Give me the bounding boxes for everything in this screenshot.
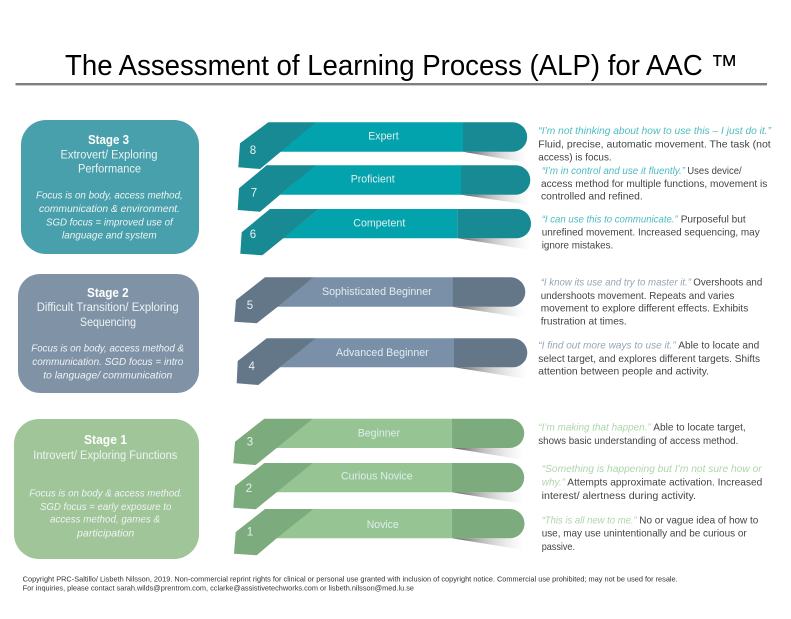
description: level 1 xyxy=(542,516,759,553)
panel: stage 2: communication. SGD focus = intro xyxy=(32,356,183,368)
level 7 ribbon: Proficient: 7 xyxy=(251,188,257,200)
level 2 ribbon: Curious Novice: Curious Novice xyxy=(341,470,413,482)
description: level 5 xyxy=(541,278,763,328)
level 2 ribbon: Curious Novice xyxy=(233,463,524,509)
description: level 2: why.” xyxy=(542,478,566,489)
level 6 ribbon: Competent xyxy=(240,209,531,255)
panel: stage 3: Extrovert/ Exploring xyxy=(60,150,158,162)
panel: stage 2: Focus is on body, access method & xyxy=(31,343,184,355)
panel: stage 2: Difficult Transition/ Exploring xyxy=(37,302,179,314)
description: level 5: frustration at times. xyxy=(541,317,627,328)
description: level 1: use, may use unintentionally and be curious or xyxy=(542,529,747,540)
description: level 5: “I know its use and try to master it.” xyxy=(541,278,692,289)
description: level 7 xyxy=(541,166,767,203)
panel: stage 3: Focus is on body, access method, xyxy=(36,190,183,202)
description: level 1: passive. xyxy=(542,542,575,553)
description: level 4: attention between people and activity. xyxy=(538,367,709,378)
description: level 8: “I’m not thinking about how to use this – I just do it.” xyxy=(538,126,772,137)
panel: stage 1: Stage 1 xyxy=(84,433,127,447)
level 5 ribbon: Sophisticated Beginner: Sophisticated Beginner xyxy=(322,286,432,298)
description: level 3: shows basic understanding of access method. xyxy=(538,436,738,447)
level 8 ribbon: Expert xyxy=(238,122,527,169)
level 8 ribbon: Expert: 8 xyxy=(250,145,256,157)
description: level 4: select target, and explores different targets. Shifts xyxy=(538,354,760,365)
level 1 ribbon: Novice: 1 xyxy=(247,526,253,538)
level 3 ribbon: Beginner: Beginner xyxy=(358,427,400,439)
panel: stage 1: Introvert/ Exploring Functions xyxy=(33,450,178,462)
level 2 ribbon: Curious Novice: 2 xyxy=(246,483,252,495)
level 1 ribbon: Novice xyxy=(234,509,525,555)
level 4 ribbon: Advanced Beginner: Advanced Beginner xyxy=(336,347,429,359)
level 7 ribbon: Proficient xyxy=(238,165,530,212)
level 3 ribbon: Beginner: 3 xyxy=(247,437,253,449)
panel: stage 1: participation xyxy=(76,528,134,540)
level 8 ribbon: Expert: Expert xyxy=(368,130,399,142)
description: level 3 xyxy=(538,423,746,447)
footer: copyright notice: Copyright PRC-Saltillo/ Lisbeth Nilsson, 2019. Non-commercial reprint rights for clinical or personal use granted with inclusion of copyright notice. Commercial use prohibited; may not be used for resale. xyxy=(23,575,678,584)
description: level 2: “Something is happening but I’m not sure how or xyxy=(542,464,762,475)
description: level 5: Overshoots and xyxy=(693,278,763,289)
level 5 ribbon: Sophisticated Beginner xyxy=(234,277,525,323)
description: level 6: Purposeful but xyxy=(681,215,746,226)
level 5 ribbon: Sophisticated Beginner: 5 xyxy=(247,300,253,312)
description: level 7: “I’m in control and use it fluently.” xyxy=(542,166,686,177)
description: level 3: “I’m making that happen.” xyxy=(538,423,651,434)
description: level 7: access method for multiple functions, movement is xyxy=(541,179,767,190)
panel: stage 1: SGD focus = early exposure to xyxy=(40,501,171,513)
description: level 6: ignore mistakes. xyxy=(542,241,613,252)
panel: stage 2: Stage 2 xyxy=(87,286,129,300)
description: level 4 xyxy=(538,341,760,378)
description: level 8: Fluid, precise, automatic movement. The task (not xyxy=(538,140,771,151)
level 7 ribbon: Proficient: Proficient xyxy=(351,174,395,186)
level 4 ribbon: Advanced Beginner xyxy=(237,338,527,385)
panel: stage 2: to language/ communication xyxy=(43,370,172,382)
panel: stage 1 xyxy=(14,419,199,559)
description: level 1: “This is all new to me.” xyxy=(542,516,637,527)
panel: stage 2: Sequencing xyxy=(80,317,136,329)
description: level 2 xyxy=(542,464,763,502)
description: level 5: movement to explore different effects. Exhibits xyxy=(541,304,748,315)
panel: stage 3: language and system xyxy=(62,230,157,242)
panel: stage 3: SGD focus = improved use of xyxy=(46,217,174,229)
panel: stage 3: Stage 3 xyxy=(88,133,129,147)
footer: copyright notice: For inquiries, please contact sarah.wilds@prentrom.com, cclarke@assistivetechworks.com or lisbeth.nilsson@med.lu.se xyxy=(23,584,414,593)
description: level 6: unrefined movement. Increased sequencing, may xyxy=(542,228,761,239)
panel: stage 1: access method, games & xyxy=(50,514,160,526)
description: level 4: Able to locate and xyxy=(678,341,760,352)
level 6 ribbon: Competent: Competent xyxy=(353,218,405,230)
description: level 7: Uses device/ xyxy=(687,166,742,177)
level 4 ribbon: Advanced Beginner: 4 xyxy=(248,361,255,373)
panel: stage 2 xyxy=(18,274,199,393)
description: level 5: undershoots movement. Repeats and varies xyxy=(541,291,734,302)
description: level 8: access) is focus. xyxy=(538,153,612,164)
footer: copyright notice xyxy=(23,575,678,593)
level 1 ribbon: Novice: Novice xyxy=(367,519,399,531)
description: level 8 xyxy=(538,126,772,164)
level 6 ribbon: Competent: 6 xyxy=(250,229,256,241)
description: level 6 xyxy=(542,215,761,252)
title: The Assessment of Learning Process (ALP) for AAC ™ xyxy=(65,50,738,82)
level 3 ribbon: Beginner xyxy=(233,419,524,465)
description: level 3: Able to locate target, xyxy=(653,423,746,434)
description: level 2: Attempts approximate activation. Increased xyxy=(567,478,763,489)
description: level 4: “I find out more ways to use it.” xyxy=(538,341,676,352)
panel: stage 3: Performance xyxy=(78,164,141,176)
description: level 6: “I can use this to communicate.” xyxy=(542,215,678,226)
description: level 1: No or vague idea of how to xyxy=(639,516,759,527)
panel: stage 3: communication & environment. xyxy=(39,203,180,215)
panel: stage 3 xyxy=(21,120,199,254)
panel: stage 1: Focus is on body & access method. xyxy=(29,488,182,500)
description: level 7: controlled and refined. xyxy=(541,192,643,203)
description: level 2: interest/ alertness during activity. xyxy=(542,491,696,502)
